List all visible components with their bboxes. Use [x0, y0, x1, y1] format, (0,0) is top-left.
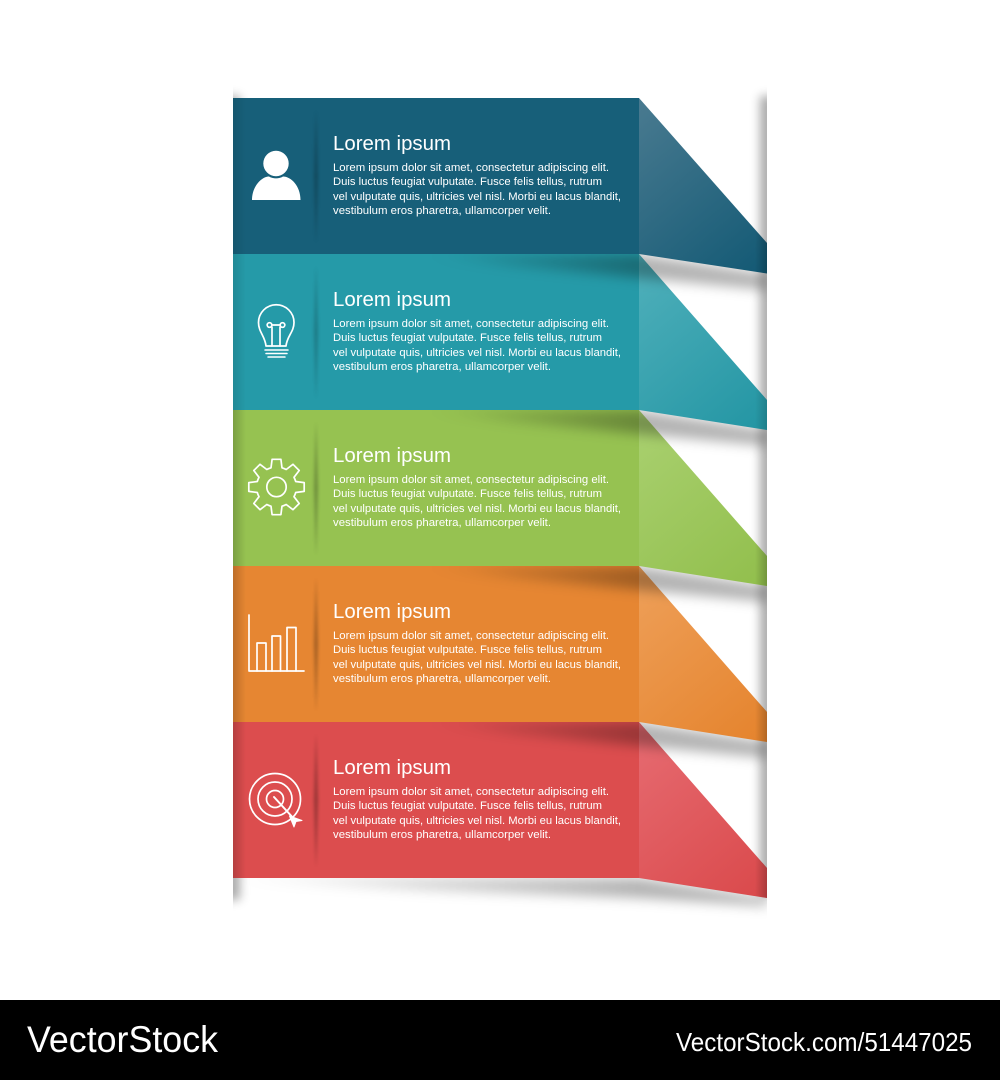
text block 4: vestibulum eros pharetra, ullamcorper velit.	[333, 673, 551, 685]
shadow cast by step 1	[420, 254, 767, 290]
shadow cast by step 2	[420, 410, 767, 446]
panel: step 5 target	[233, 722, 767, 898]
divider 4	[314, 577, 318, 712]
heading 5: Lorem ipsum	[333, 756, 451, 779]
divider 1	[314, 109, 318, 244]
shadow cast by step 3	[420, 566, 767, 602]
flap 1	[639, 98, 767, 274]
icon: target	[250, 774, 302, 827]
footer brand: VectorStock	[27, 1019, 218, 1060]
text block 4	[333, 630, 621, 685]
text block 3	[333, 474, 621, 529]
text block 1	[333, 162, 621, 217]
right fold shade 5	[755, 854, 767, 898]
text block 5: Duis luctus feugiat vulputate. Fusce felis tellus, rutrum	[333, 800, 602, 812]
heading 4: Lorem ipsum	[333, 600, 451, 623]
footer bar	[0, 1000, 1000, 1080]
text block 3: vel vulputate quis, ultricies vel nisl. Morbi eu lacus blandit,	[333, 503, 621, 515]
footer image id: VectorStock.com/51447025	[676, 1027, 972, 1057]
text block 4: Lorem ipsum dolor sit amet, consectetur adipiscing elit.	[333, 630, 609, 642]
flap 2	[639, 254, 767, 430]
left fold shade 1	[233, 98, 246, 254]
right fold shade 2	[755, 386, 767, 430]
panel: step 1 person	[233, 98, 767, 274]
text block 5: vel vulputate quis, ultricies vel nisl. Morbi eu lacus blandit,	[333, 815, 621, 827]
text block 2: Duis luctus feugiat vulputate. Fusce felis tellus, rutrum	[333, 332, 602, 344]
panel: step 3 gear	[233, 410, 767, 586]
right fold shade 1	[755, 229, 767, 274]
text block 5	[333, 786, 621, 841]
band 5	[233, 722, 639, 878]
left fold shade 2	[233, 254, 246, 410]
heading 1: Lorem ipsum	[333, 132, 451, 155]
left fold shade 3	[233, 410, 246, 566]
band 4	[233, 566, 639, 722]
right edge shadow	[754, 90, 767, 902]
text block 1: Duis luctus feugiat vulputate. Fusce felis tellus, rutrum	[333, 176, 602, 188]
text block 1: Lorem ipsum dolor sit amet, consectetur adipiscing elit.	[333, 162, 609, 174]
panel: step 4 chart	[233, 566, 767, 742]
icon: bar chart	[249, 615, 304, 671]
divider 3	[314, 421, 318, 556]
text block 2: vel vulputate quis, ultricies vel nisl. Morbi eu lacus blandit,	[333, 347, 621, 359]
heading 2: Lorem ipsum	[333, 288, 451, 311]
left fold shade 4	[233, 566, 246, 722]
band 1	[233, 98, 639, 254]
divider 2	[314, 265, 318, 400]
shadow under step 5	[233, 878, 767, 906]
flap 3	[639, 410, 767, 586]
text block 4: vel vulputate quis, ultricies vel nisl. Morbi eu lacus blandit,	[333, 659, 621, 671]
flap 4	[639, 566, 767, 742]
icon: gear	[249, 459, 304, 515]
flap 5	[639, 722, 767, 898]
text block 2	[333, 318, 621, 373]
text block 2: Lorem ipsum dolor sit amet, consectetur adipiscing elit.	[333, 318, 609, 330]
band 3	[233, 410, 639, 566]
text block 3: Lorem ipsum dolor sit amet, consectetur adipiscing elit.	[333, 474, 609, 486]
band 2	[233, 254, 639, 410]
icon: light bulb	[258, 305, 294, 357]
text block 3: vestibulum eros pharetra, ullamcorper velit.	[333, 517, 551, 529]
text block 1: vestibulum eros pharetra, ullamcorper velit.	[333, 205, 551, 217]
text block 1: vel vulputate quis, ultricies vel nisl. Morbi eu lacus blandit,	[333, 191, 621, 203]
heading 3: Lorem ipsum	[333, 444, 451, 467]
panel: step 2 light bulb	[233, 254, 767, 430]
text block 3: Duis luctus feugiat vulputate. Fusce felis tellus, rutrum	[333, 488, 602, 500]
text block 5: Lorem ipsum dolor sit amet, consectetur adipiscing elit.	[333, 786, 609, 798]
right fold shade 4	[755, 698, 767, 742]
text block 2: vestibulum eros pharetra, ullamcorper velit.	[333, 361, 551, 373]
left edge shadow	[233, 90, 246, 906]
shadow cast by step 4	[420, 722, 767, 758]
left fold shade 5	[233, 722, 246, 878]
icon: person	[252, 151, 300, 200]
text block 5: vestibulum eros pharetra, ullamcorper velit.	[333, 829, 551, 841]
text block 4: Duis luctus feugiat vulputate. Fusce felis tellus, rutrum	[333, 644, 602, 656]
right fold shade 3	[755, 542, 767, 586]
divider 5	[314, 733, 318, 868]
